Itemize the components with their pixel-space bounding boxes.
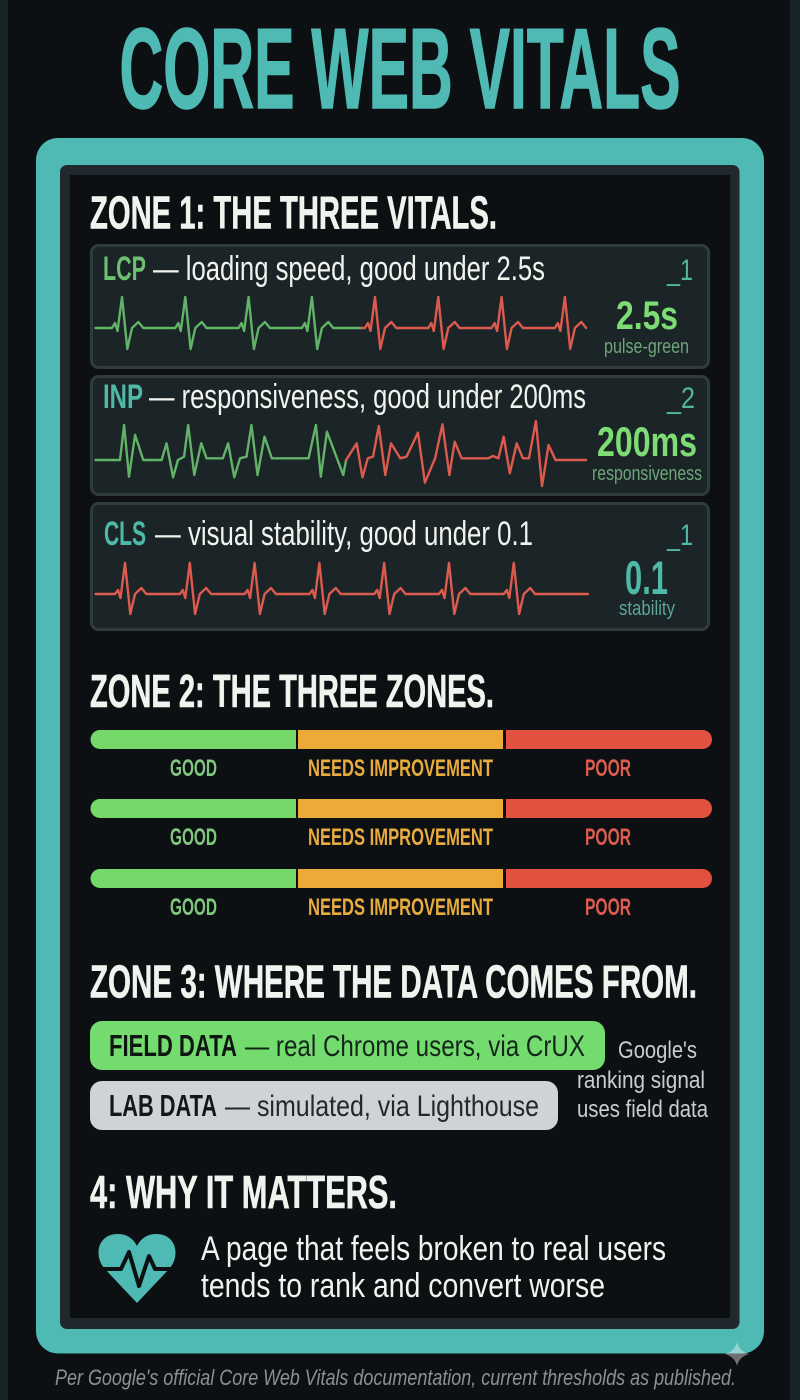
LCP pulse line: green xyxy=(96,297,361,349)
INP pulse line: green xyxy=(96,425,346,477)
LCP pulse line: red xyxy=(362,297,586,349)
CLS rank: _1 xyxy=(666,519,693,552)
CLS threshold: 0.1 xyxy=(625,551,668,604)
INP label: INP xyxy=(103,378,143,416)
CLS label: CLS xyxy=(104,515,146,553)
zone bar 3 xyxy=(90,869,712,921)
side note: Google's xyxy=(618,1037,697,1064)
heading: zone 2: ZONE 2: THE THREE ZONES. xyxy=(90,665,494,717)
LCP label: LCP xyxy=(103,250,146,288)
LCP caption: pulse-green xyxy=(604,336,689,358)
why it matters text xyxy=(201,1230,666,1305)
lab data pill xyxy=(90,1081,558,1130)
side note: uses field data xyxy=(577,1096,709,1123)
heading: zone 1: ZONE 1: THE THREE VITALS. xyxy=(90,186,497,238)
field data pill: — real Chrome users, via CrUX xyxy=(245,1030,585,1063)
lab data pill: LAB DATA xyxy=(109,1088,217,1123)
why it matters text: A page that feels broken to real users xyxy=(201,1230,666,1268)
zone bar 1: NEEDS IMPROVEMENT xyxy=(308,755,493,782)
side note xyxy=(577,1037,709,1123)
INP caption: responsiveness xyxy=(592,463,702,485)
zone bar 3: POOR xyxy=(585,894,631,921)
zone bar 1 xyxy=(90,730,712,782)
CLS description: — visual stability, good under 0.1 xyxy=(155,515,533,553)
zone bar 1: POOR xyxy=(585,755,631,782)
zone bar 3: GOOD xyxy=(170,894,217,921)
icon: heart with pulse xyxy=(96,1234,178,1303)
zone bar 2 xyxy=(90,799,712,851)
field data pill xyxy=(90,1021,605,1070)
zone bar 2: GOOD xyxy=(170,824,217,851)
LCP description: — loading speed, good under 2.5s xyxy=(153,250,545,288)
LCP threshold: 2.5s xyxy=(616,294,678,338)
zone bar 2: POOR xyxy=(585,824,631,851)
INP pulse lines xyxy=(96,421,586,486)
why it matters text: tends to rank and convert worse xyxy=(201,1267,605,1305)
panel: INP card xyxy=(92,376,708,494)
panel: CLS card xyxy=(92,504,708,630)
panel: teal frame xyxy=(36,138,764,1354)
INP threshold: 200ms xyxy=(597,418,697,465)
LCP rank: _1 xyxy=(666,254,693,287)
CLS caption: stability xyxy=(619,598,675,620)
zone bar 1: GOOD xyxy=(170,755,217,782)
panel: LCP card xyxy=(92,246,708,368)
heading: why it matters: 4: WHY IT MATTERS. xyxy=(90,1166,397,1218)
icon: sparkle xyxy=(725,1342,749,1366)
INP description: — responsiveness, good under 200ms xyxy=(149,378,586,416)
INP rank: _2 xyxy=(666,382,695,415)
zone bar 3: NEEDS IMPROVEMENT xyxy=(308,894,493,921)
lab data pill: — simulated, via Lighthouse xyxy=(225,1090,539,1123)
field data pill: FIELD DATA xyxy=(109,1028,237,1063)
side note: ranking signal xyxy=(577,1067,705,1094)
zone bar 2: NEEDS IMPROVEMENT xyxy=(308,824,493,851)
CLS pulse line: red xyxy=(96,563,588,614)
INP pulse line: red xyxy=(346,421,586,486)
